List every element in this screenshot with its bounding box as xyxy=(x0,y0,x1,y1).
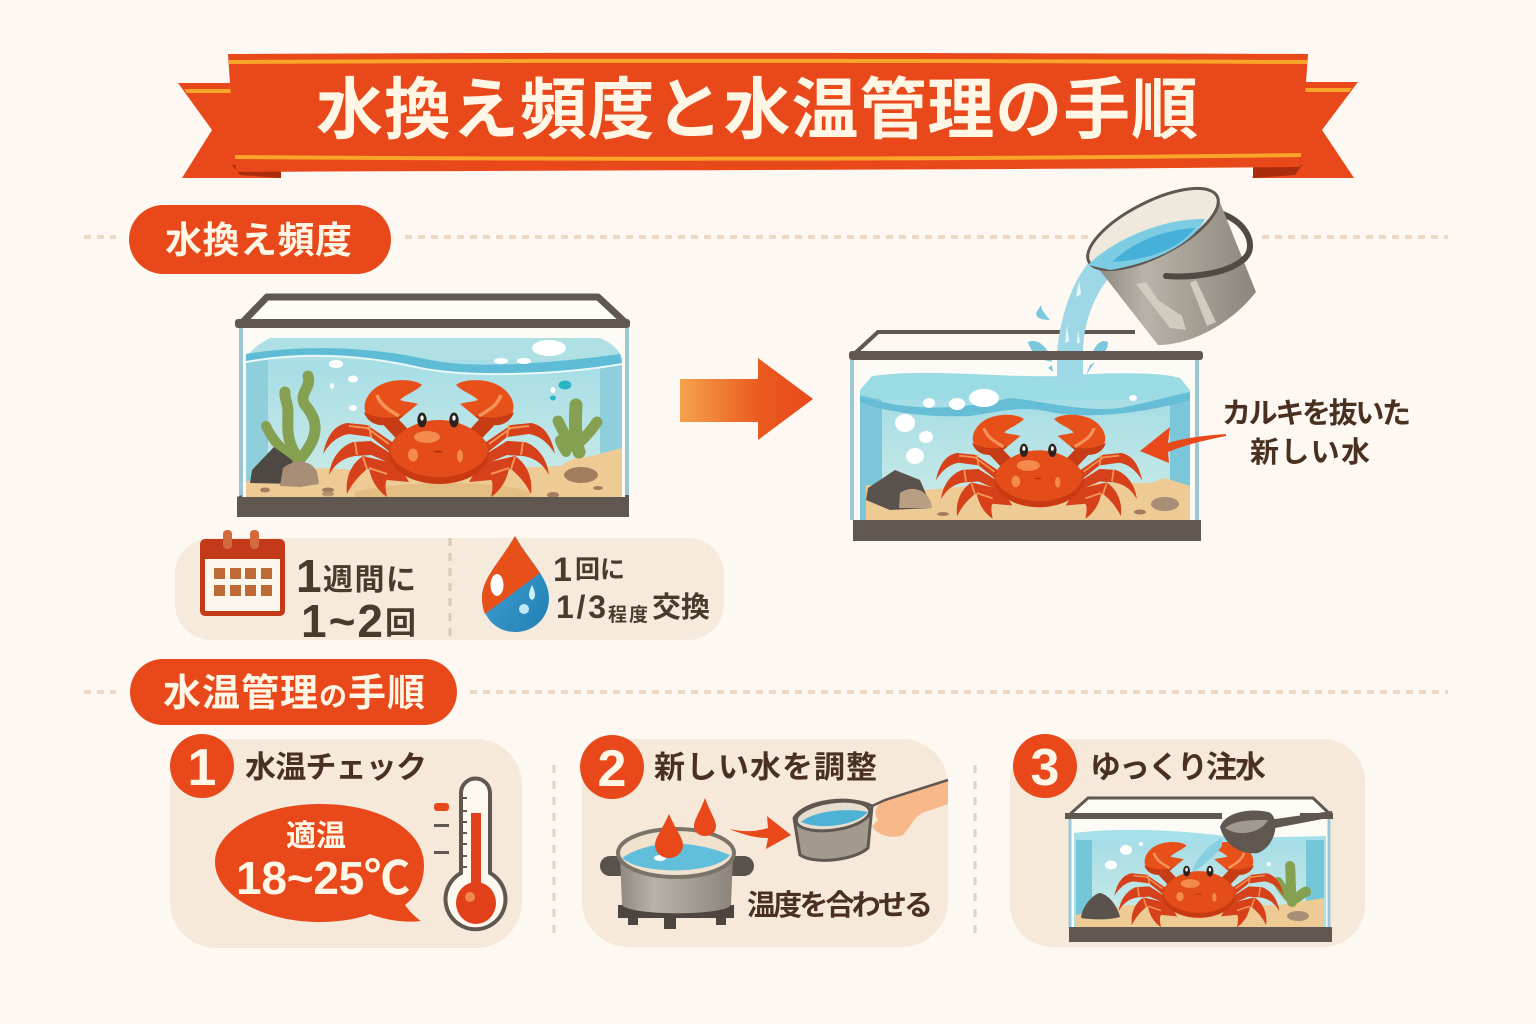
sand xyxy=(1076,898,1324,928)
tank 1: before water change xyxy=(235,297,630,517)
crab xyxy=(936,415,1142,519)
ribbon tail right xyxy=(1252,82,1358,178)
step number 1 xyxy=(170,734,234,798)
section heading pill: temperature procedure xyxy=(130,659,457,725)
step number 2 xyxy=(580,735,644,799)
section heading pill: temperature procedure: 水温管理の手順 xyxy=(163,673,425,715)
text: replace one third each time xyxy=(553,551,710,626)
text: match temperature: 温度を合わせる xyxy=(747,889,933,922)
seaweed xyxy=(1278,866,1306,902)
step number 3 xyxy=(1013,734,1077,798)
ribbon stripes xyxy=(229,59,1308,161)
bucket handle xyxy=(1166,212,1250,276)
tank 2: after water change xyxy=(849,262,1203,541)
text: once or twice a week: 回 xyxy=(385,606,416,641)
bucket water xyxy=(1088,219,1205,270)
icon: heat drops xyxy=(655,798,716,858)
title text: 水換え頻度と水温管理の手順 xyxy=(316,73,1198,148)
text: replace one third each time: 1/3 xyxy=(556,589,606,625)
step 2 heading: 新しい水を調整 xyxy=(654,750,877,785)
ribbon main xyxy=(228,53,1308,172)
bucket pouring water xyxy=(1077,172,1256,345)
rock xyxy=(1081,893,1120,919)
callout: new dechlorinated water xyxy=(1140,397,1411,469)
step number 1: 1 xyxy=(188,739,216,797)
section divider: water change xyxy=(84,235,1448,239)
icon: cup held by hand xyxy=(794,780,948,860)
stream highlights xyxy=(1065,281,1081,344)
splash droplets xyxy=(1028,305,1108,375)
step 1 heading: 水温チェック xyxy=(245,750,427,785)
icon: thermometer xyxy=(434,779,506,929)
speech bubble: suitable temperature: 18~25℃ xyxy=(236,852,410,904)
section heading pill: water change frequency: 水換え頻度 xyxy=(165,220,352,261)
rocks xyxy=(866,470,932,510)
step 2 card: adjust new water xyxy=(580,735,948,947)
tank rim xyxy=(235,319,630,328)
icon: pot of water xyxy=(600,829,754,929)
sand xyxy=(866,478,1190,520)
section divider: temperature xyxy=(84,690,1448,694)
tank rim xyxy=(849,351,1203,360)
icon: calendar xyxy=(200,530,285,616)
pouring water stream xyxy=(1057,262,1110,385)
tank base xyxy=(853,520,1201,541)
step 3 card: pour slowly xyxy=(1010,734,1365,947)
speech bubble: suitable temperature: 適温 xyxy=(286,820,346,853)
bucket rim xyxy=(1077,172,1229,286)
callout arrow xyxy=(1140,427,1226,463)
arrow: to refill xyxy=(680,358,813,440)
speech bubble: suitable temperature xyxy=(215,804,424,922)
text: once or twice a week: 週間に xyxy=(323,564,416,597)
ribbon tail left xyxy=(178,83,281,178)
crab xyxy=(1114,842,1284,927)
step number 2: 2 xyxy=(598,740,626,798)
glass walls xyxy=(241,328,627,498)
poured water xyxy=(1192,838,1222,872)
tank 3 xyxy=(1065,798,1333,942)
glass walls xyxy=(852,360,1197,520)
text: replace one third each time: 程度 xyxy=(608,604,648,626)
glass walls xyxy=(1070,818,1329,928)
water surface xyxy=(246,348,622,374)
callout: new dechlorinated water: カルキを抜いた xyxy=(1222,397,1411,430)
seaweed left xyxy=(266,376,315,462)
arrow: to cup xyxy=(729,816,791,849)
step 3 heading: ゆっくり注水 xyxy=(1090,750,1266,785)
info panel: frequency and amount xyxy=(175,530,724,647)
text: replace one third each time: 交換 xyxy=(652,591,710,624)
icon: half water drop xyxy=(482,536,549,632)
tank rim xyxy=(1065,813,1333,819)
step number 3: 3 xyxy=(1031,739,1059,797)
text: once or twice a week: 1 xyxy=(296,550,322,602)
divider between step 1 and 2 xyxy=(554,765,975,935)
section heading pill: water change frequency xyxy=(129,205,391,274)
water surface waves xyxy=(860,392,1190,416)
callout: new dechlorinated water: 新しい水 xyxy=(1250,436,1370,469)
title banner xyxy=(178,53,1358,178)
rocks xyxy=(250,447,300,484)
tank base xyxy=(1069,927,1332,942)
step 1 card: check temperature xyxy=(170,734,522,948)
text: replace one third each time: 回に xyxy=(575,556,625,584)
text: once or twice a week: 1~2 xyxy=(301,595,383,647)
sand xyxy=(246,448,622,500)
crab xyxy=(323,380,555,497)
tank base xyxy=(237,495,629,517)
seaweed right xyxy=(558,405,597,452)
bucket body xyxy=(1098,200,1256,345)
ladle pouring xyxy=(1192,811,1333,872)
text: once or twice a week xyxy=(296,550,416,647)
text: replace one third each time: 1 xyxy=(553,551,572,589)
